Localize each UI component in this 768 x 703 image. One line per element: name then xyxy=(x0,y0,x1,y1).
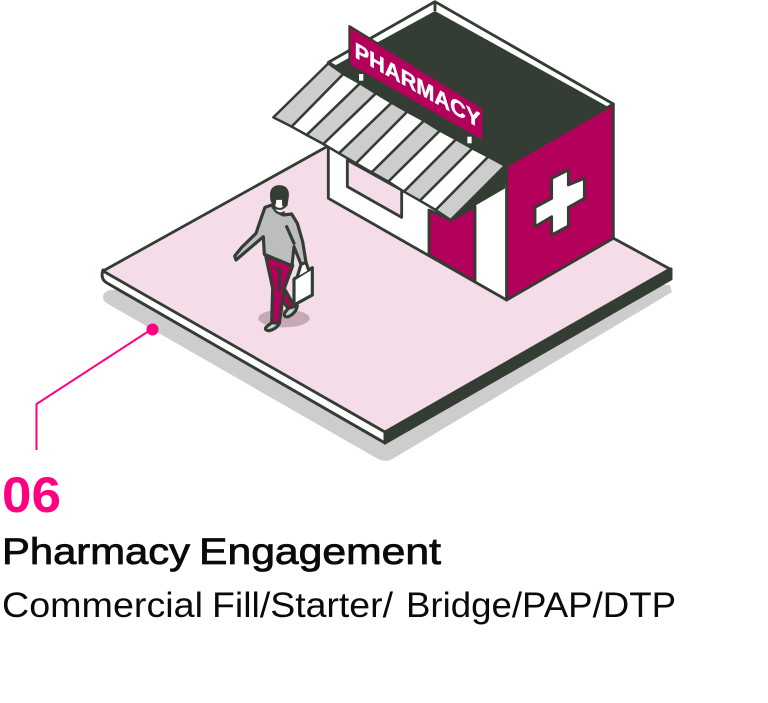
heading xyxy=(2,531,442,572)
roof surface xyxy=(336,11,608,220)
pharmacy building xyxy=(273,2,613,300)
callout dot xyxy=(146,324,158,336)
platform side: front right xyxy=(385,269,671,443)
back leg xyxy=(277,287,294,309)
front leg xyxy=(266,256,293,323)
person shadow xyxy=(258,309,310,327)
hair xyxy=(272,187,287,205)
subheading: Bridge/PAP/DTP xyxy=(406,586,676,625)
side wall xyxy=(507,104,613,300)
front wall xyxy=(328,143,507,300)
back shoe xyxy=(284,306,297,317)
heading: Pharmacy xyxy=(2,531,191,572)
pharmacy sign xyxy=(349,26,483,142)
platform side: front left xyxy=(102,270,385,443)
front shoe xyxy=(265,323,279,331)
subheading: Fill/Starter/ xyxy=(212,586,393,625)
head xyxy=(273,196,285,209)
sign text: PHARMACY xyxy=(355,38,481,134)
roof xyxy=(328,2,613,220)
platform top xyxy=(103,146,670,432)
platform xyxy=(102,146,672,461)
maroon door panel xyxy=(429,207,475,282)
white cross xyxy=(535,170,584,235)
neck xyxy=(273,208,284,213)
platform shadow xyxy=(103,285,672,461)
person walking xyxy=(235,187,312,331)
subheading: Commercial xyxy=(2,586,203,625)
shopping bag xyxy=(294,268,312,305)
subheading xyxy=(2,586,676,625)
roof parapet xyxy=(328,2,613,166)
heading: Engagement xyxy=(199,531,442,572)
bag handle and hand xyxy=(297,262,309,277)
torso and arms xyxy=(235,205,306,266)
sign posts xyxy=(359,74,472,143)
front window xyxy=(347,160,402,217)
step number: 06 xyxy=(2,467,61,523)
awning xyxy=(273,63,505,220)
callout leader line xyxy=(36,324,158,450)
